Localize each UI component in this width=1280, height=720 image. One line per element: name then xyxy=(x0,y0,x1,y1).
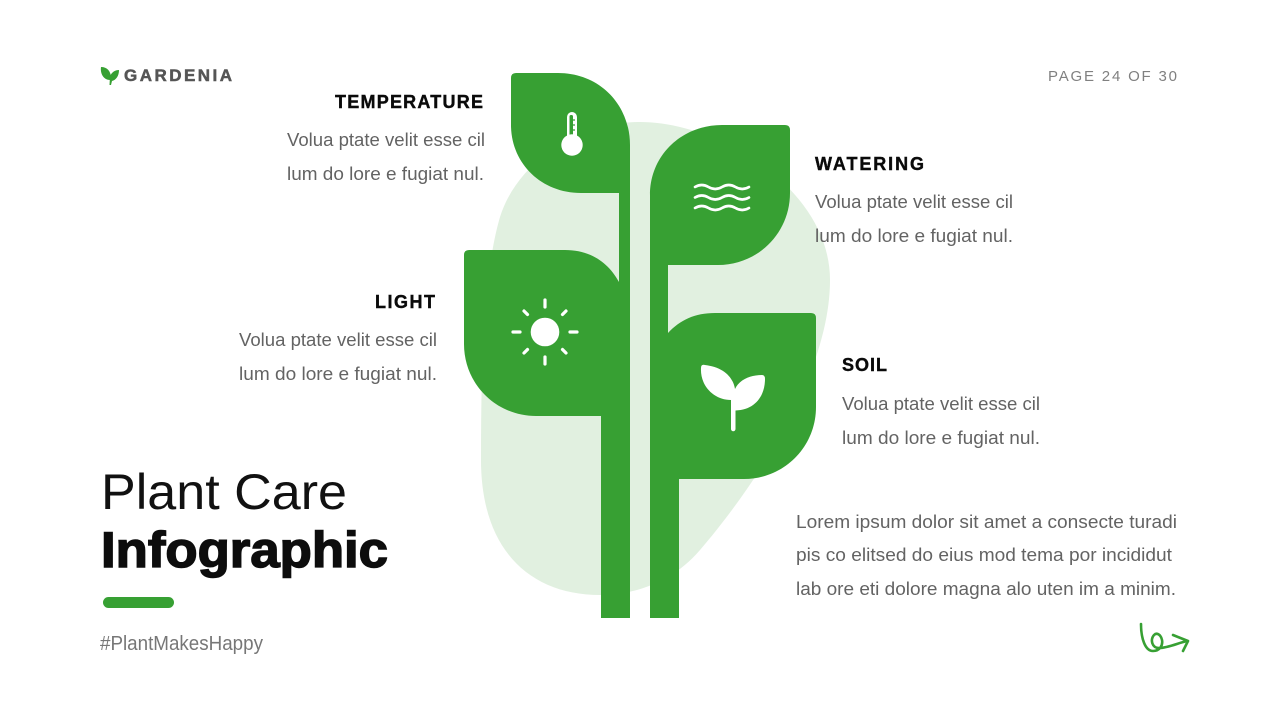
text block: watering: lum do lore e fugiat nul. xyxy=(815,226,1013,246)
icon: thermometer xyxy=(561,112,583,156)
icon: curly arrow xyxy=(1141,624,1188,651)
accent bar xyxy=(103,597,174,608)
text block: description: pis co elitsed do eius mod tema por incididut xyxy=(796,545,1172,565)
text block: watering: Volua ptate velit esse cil xyxy=(815,192,1013,212)
icon: water waves xyxy=(695,185,749,210)
text block: temperature: lum do lore e fugiat nul. xyxy=(287,164,484,184)
text block: light: Volua ptate velit esse cil xyxy=(239,330,437,350)
logo: GARDENIA xyxy=(124,66,232,85)
hashtag: #PlantMakesHappy xyxy=(100,633,263,655)
icon: sun xyxy=(513,300,577,364)
text block: soil: lum do lore e fugiat nul. xyxy=(842,428,1040,448)
text block: light xyxy=(239,292,437,384)
text block: soil xyxy=(842,355,1040,448)
text block: description: lab ore eti dolore magna alo uten im a minim. xyxy=(796,579,1176,599)
title: Infographic xyxy=(101,522,388,578)
text block: description xyxy=(796,512,1177,599)
text block: soil: Volua ptate velit esse cil xyxy=(842,394,1040,414)
text block: soil: SOIL xyxy=(842,355,887,375)
plant: right stem with watering and soil leaves xyxy=(650,125,816,618)
title xyxy=(101,464,388,578)
plant: left stem with temperature and light leaves xyxy=(464,73,630,618)
text block: watering: WATERING xyxy=(815,154,924,174)
text block: watering xyxy=(815,154,1013,246)
text block: temperature xyxy=(287,92,485,184)
text block: light: lum do lore e fugiat nul. xyxy=(239,364,437,384)
title: Plant Care xyxy=(101,464,347,520)
text block: temperature: Volua ptate velit esse cil xyxy=(287,130,485,150)
icon: logo sprout xyxy=(101,67,119,85)
background blob xyxy=(481,122,830,595)
text block: temperature: TEMPERATURE xyxy=(335,92,483,112)
text block: light: LIGHT xyxy=(375,292,435,312)
page number: PAGE 24 OF 30 xyxy=(1048,68,1177,85)
icon: sprout xyxy=(701,365,765,431)
text block: description: Lorem ipsum dolor sit amet a consecte turadi xyxy=(796,512,1177,532)
